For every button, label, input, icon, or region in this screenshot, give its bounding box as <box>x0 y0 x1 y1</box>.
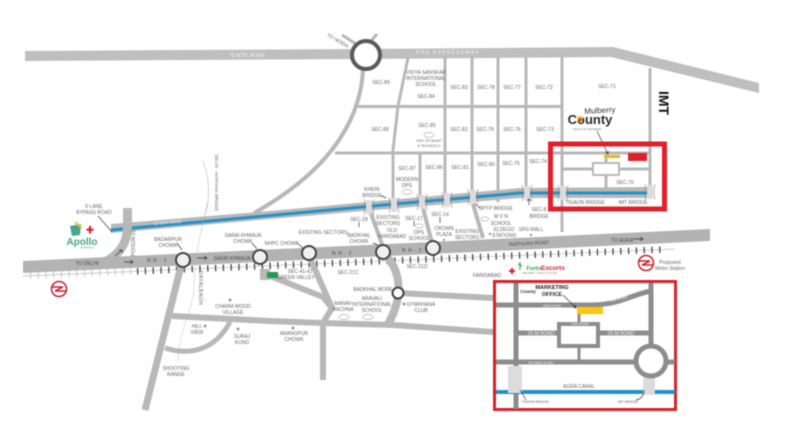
national highway NH-2 and Mathura Road: TO DELHI <box>76 261 98 267</box>
south labels <box>163 260 685 378</box>
inset marketing office marker <box>577 307 603 314</box>
mulberry county logo: Mulberry <box>584 105 616 116</box>
inset marketing office label <box>535 285 569 298</box>
mid labels: SEC-14 <box>431 212 449 218</box>
mid labels: CHOWK <box>233 239 253 245</box>
south labels: SEC-21C <box>337 270 359 276</box>
mid labels: EXISTING <box>376 215 400 221</box>
south labels: KUND <box>235 340 249 346</box>
project marker yellow <box>604 155 620 158</box>
north labels: DPS <box>402 183 413 189</box>
mid labels: BRIDGE <box>362 193 382 199</box>
mulberry county logo: Sector-70, Faridabad <box>573 127 601 131</box>
icon: apollo hospitals logo <box>66 222 98 250</box>
mid labels: 6 LANE <box>85 204 103 210</box>
mid labels: KHERI <box>364 187 380 193</box>
mid labels: M V N <box>494 214 508 220</box>
north labels: SEC-78 <box>477 85 495 91</box>
mid labels: EXISTING SECTORS <box>299 230 348 236</box>
inset tigaon bridge label: TIGAON BRIDGE <box>521 400 550 404</box>
mid labels: EXISTING <box>455 229 479 235</box>
north labels: SEC-74 <box>529 159 547 165</box>
mid labels: ELDEGO <box>494 227 515 233</box>
south labels: CLUB <box>414 308 428 314</box>
south labels: RANGE <box>167 372 186 378</box>
north labels: VIDYA SANSKAR <box>406 70 446 76</box>
north labels: MODERN <box>396 177 418 183</box>
canal bridges <box>364 184 655 215</box>
mid labels: IMT BRIDGE <box>618 200 648 206</box>
south labels: DAYALBAGH <box>197 271 203 305</box>
mid labels: SECTORS <box>376 221 401 227</box>
south labels: SHOOTING <box>163 366 189 372</box>
south labels: RACHNA <box>332 307 354 313</box>
mid labels: BYPASS ROAD <box>76 210 112 216</box>
icon: metro station east <box>638 256 654 270</box>
national highway NH-2 and Mathura Road: N H - 2 <box>332 251 352 257</box>
north labels: SEC-72 <box>535 85 553 91</box>
fortis escorts logo: Escorts <box>541 265 565 272</box>
north labels <box>214 33 634 211</box>
inset tigaon bridge <box>508 366 522 393</box>
north labels: SEC-79 <box>476 127 494 133</box>
south labels: SEC-41-42 <box>288 269 313 275</box>
south labels: CHARM WOOD <box>215 304 251 310</box>
inset canal <box>496 390 675 394</box>
mid labels: NHPC CHOWK <box>265 241 300 247</box>
south labels: ANANGPUR <box>280 331 309 337</box>
mid labels: OLD <box>387 228 398 234</box>
inset agra canal label: AGRA CANAL <box>563 384 595 390</box>
mid labels: FARIDABAD <box>378 234 407 240</box>
mid labels <box>76 187 648 256</box>
school icons <box>339 132 489 320</box>
north labels: SEC-84 <box>417 94 435 100</box>
canal road with blue canal <box>111 187 652 233</box>
dayalbagh dotted line <box>178 200 208 363</box>
mid labels: BADKHAL <box>347 233 371 239</box>
north labels: SEC-82 <box>450 127 468 133</box>
mid labels: BRIDGE <box>529 214 549 220</box>
north labels: SEC-76 <box>503 127 521 133</box>
inset road labels: 24 M ROAD <box>608 331 635 337</box>
inset road labels: 40M ROAD <box>610 295 628 303</box>
south labels: INTERNATIONAL <box>352 302 392 308</box>
north labels: SEC-89 <box>372 80 390 86</box>
national highway NH-2 and Mathura Road: SARAI KHWAJA <box>213 256 251 262</box>
inset road labels <box>528 295 635 365</box>
north labels: SEC-88 <box>371 127 389 133</box>
national highway NH-2 and Mathura Road: TO AGRA <box>611 238 634 244</box>
south labels: SCHOOL <box>361 308 383 314</box>
chowk circles <box>176 241 440 298</box>
inset road labels: 40M ROAD <box>543 304 561 308</box>
inset road labels: 24M ROAD <box>571 322 589 326</box>
south labels: MANAV <box>334 301 352 307</box>
project marker red <box>628 153 647 161</box>
mid labels: SEC-8 <box>532 207 547 213</box>
icon: apollo hospitals logo: HOSPITALS <box>80 246 94 250</box>
mid labels: SCHOOL <box>490 221 512 227</box>
north labels: & TECHNOLO <box>418 144 441 148</box>
mid labels: SECTORS <box>455 235 480 241</box>
north labels: SEC-87 <box>398 166 416 172</box>
direction arrows <box>115 199 643 264</box>
north labels: INTERNATIONAL <box>406 76 446 82</box>
arrow to project <box>597 131 608 154</box>
icon: apollo hospitals logo: Apollo <box>66 237 98 248</box>
south labels: GREEN VALLEY <box>277 275 316 281</box>
fortis escorts logo <box>509 262 565 275</box>
north labels: DELHI - HARYANA BRIDGE <box>214 155 219 211</box>
inset roundabout <box>636 346 666 376</box>
north labels: SEC-77 <box>503 85 521 91</box>
mid labels: DPS <box>414 230 425 236</box>
north labels: INST OF MGMT <box>416 139 443 143</box>
south labels: ARAVALI <box>362 296 382 302</box>
south labels: HILL <box>192 324 202 330</box>
inset road labels: BYPASS ROAD <box>529 361 554 365</box>
inset road labels: 24 M ROAD <box>528 331 555 337</box>
inset marketing office label: MARKETING <box>535 285 569 291</box>
southern roads <box>145 258 493 410</box>
mid labels: SEC-17 <box>405 216 423 222</box>
mid labels: PLAZA <box>436 232 453 238</box>
mid labels: CROWN <box>434 226 454 232</box>
metro rail line <box>23 249 675 276</box>
fortis escorts logo: Fortis <box>526 266 542 272</box>
north labels: SEC-71 <box>598 84 616 90</box>
south labels: FARIDABAD <box>473 273 502 279</box>
inset imt bridge label: IMT BRIDGE <box>618 400 639 404</box>
mid labels: SRS MALL <box>519 227 544 233</box>
north labels: SEC-70 <box>616 180 634 186</box>
roundabout: FNG junction <box>352 41 380 69</box>
fortis escorts logo: HEART INSTITUTE <box>522 271 558 275</box>
national highway NH-2 and Mathura Road <box>23 208 710 273</box>
south labels: SURAJ <box>234 334 251 340</box>
south labels: CHOWK <box>284 337 304 343</box>
inset imt bridge <box>643 377 655 395</box>
mid labels: POISON 02 <box>131 230 137 256</box>
inset arrow <box>563 295 576 308</box>
national highway NH-2 and Mathura Road: N H - 2 <box>402 248 422 254</box>
south labels: GYMKHANA <box>407 302 436 308</box>
mid labels: BPTP BRIDGE <box>479 206 513 212</box>
sector road grid <box>254 34 650 247</box>
delhi haryana boundary line <box>203 161 209 215</box>
leader lines <box>98 195 480 250</box>
IMT label: IMT <box>656 91 672 115</box>
callout frame: project area <box>550 144 664 209</box>
mid labels: SEC-28 <box>350 217 368 223</box>
mid labels: SARAI KHWAJA <box>224 233 262 239</box>
place dots <box>204 233 532 330</box>
mid labels: STATIONS <box>492 233 517 239</box>
green valley marker <box>267 272 278 278</box>
inset marketing office label: OFFICE <box>542 292 562 298</box>
inset bridge leaders <box>520 390 644 400</box>
mulberry county logo: County <box>568 112 613 127</box>
north labels: SEC-86 <box>425 165 443 171</box>
icon: metro station west <box>52 282 66 296</box>
mid labels: TIGAON BRIDGE <box>565 200 606 206</box>
national highway NH-2 and Mathura Road: MATHURA ROAD <box>509 240 549 248</box>
south labels: VILLAGE <box>223 310 244 316</box>
south labels: SEC-21D <box>406 264 428 270</box>
north labels: SEC-85 <box>418 123 436 129</box>
inset roads <box>496 283 675 409</box>
north labels: SEC-80 <box>477 162 495 168</box>
mid labels: CHOWK <box>349 239 369 245</box>
inset panel: marketing office map <box>494 282 676 410</box>
road: 75 mtr road and FNG expressway: FNG EXPRESSWAY <box>416 50 480 56</box>
road: 75 mtr road and FNG expressway <box>25 47 759 93</box>
canal road with blue canal: 60 MTR. ROAD <box>154 219 182 226</box>
mid labels: BADARPUR <box>154 237 182 243</box>
north labels: SEC-83 <box>450 85 468 91</box>
south labels: BADKHAL MORE <box>353 287 393 293</box>
inset county logo: County <box>520 289 536 294</box>
mulberry county logo <box>568 105 616 131</box>
south labels: Metro Station <box>655 266 685 272</box>
north labels: SEC-75 <box>502 161 520 167</box>
north labels: TO NOIDA <box>326 33 350 50</box>
south labels: Proposed <box>659 260 681 266</box>
north labels: SCHOOL <box>415 82 437 88</box>
road: 75 mtr road and FNG expressway: 75 MTR. ROAD <box>229 53 265 59</box>
north labels: SEC-73 <box>536 127 554 133</box>
mid labels: SCHOOL <box>408 236 430 242</box>
national highway NH-2 and Mathura Road: N H - 2 <box>147 258 167 264</box>
north labels: SEC-81 <box>451 165 469 171</box>
mid labels: CHOWK <box>158 243 178 249</box>
south labels: VIEW <box>191 330 204 336</box>
